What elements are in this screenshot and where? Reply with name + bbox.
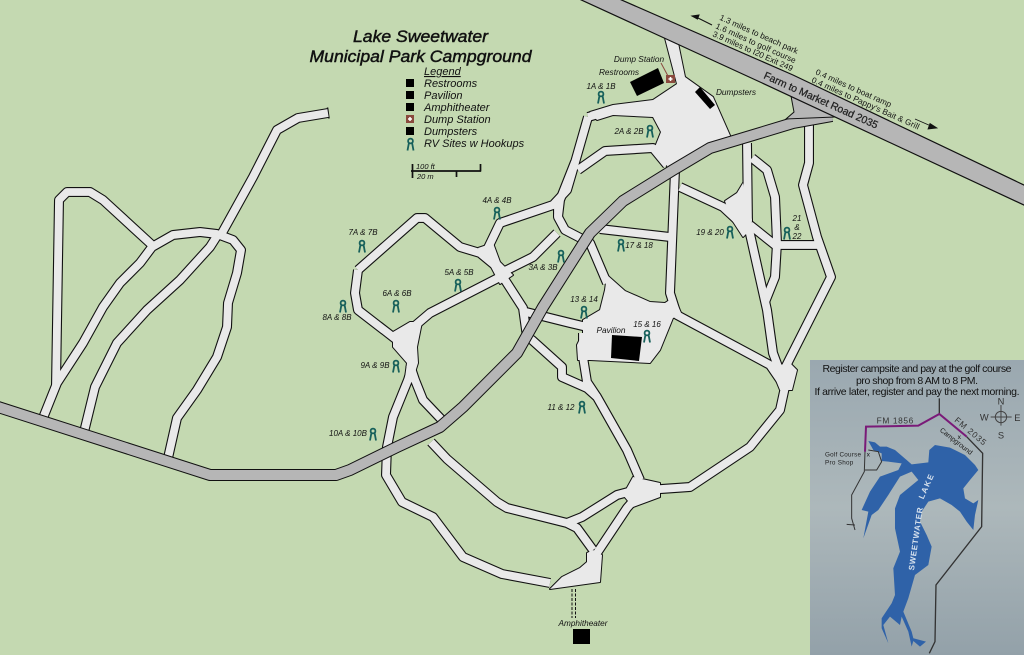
RV site 11 & 12 — [548, 402, 585, 414]
scale bar — [411, 162, 481, 181]
RV site 21 & 22: 21 — [792, 214, 801, 223]
RV site 11 & 12: 11 & 12 — [548, 403, 575, 412]
RV site 21 & 22: & — [794, 223, 800, 232]
RV site 21 & 22: 22 — [792, 232, 802, 241]
lake name: LAKE — [917, 472, 936, 500]
RV site 19 & 20 — [696, 227, 733, 238]
legend: Pavilion — [424, 90, 463, 102]
compass rose: W — [980, 412, 989, 422]
RV site 7A & 7B: 7A & 7B — [348, 228, 378, 237]
directions toward the east: 0.4 miles to boat ramp — [814, 68, 893, 109]
RV site 8A & 8B — [322, 301, 352, 322]
scale bar: 100 ft — [416, 162, 436, 171]
compass rose: N — [998, 396, 1004, 406]
registration instructions: If arrive later, register and pay the next morning. — [814, 386, 1020, 398]
panel: registration and lake location photo — [810, 360, 1024, 655]
RV site 13 & 14 — [570, 295, 598, 318]
RV site 3A & 3B: 3A & 3B — [528, 263, 558, 272]
legend: Dumpsters — [424, 126, 478, 138]
RV site 15 & 16 — [633, 320, 661, 342]
building: restrooms — [599, 67, 664, 96]
registration instructions: pro shop from 8 AM to 8 PM. — [856, 375, 978, 387]
legend heading: Legend — [424, 66, 462, 78]
campground road network — [43, 38, 831, 589]
RV site 21 & 22 — [784, 214, 802, 241]
RV site 2A & 2B: 2A & 2B — [613, 127, 644, 136]
RV site 1A & 1B — [586, 82, 616, 104]
directions toward the west — [711, 13, 800, 73]
RV site 4A & 4B — [482, 196, 512, 220]
title: Municipal Park Campground — [310, 48, 533, 66]
legend: Amphitheater — [423, 102, 491, 114]
building: amphitheater — [558, 589, 609, 644]
RV site 6A & 6B: 6A & 6B — [382, 289, 412, 298]
road labels: x — [958, 434, 962, 441]
icon: dump station — [614, 54, 675, 83]
RV site 6A & 6B — [382, 289, 412, 312]
west road and golf course loop — [847, 450, 882, 530]
directions toward the west: 1.6 miles to golf course — [714, 22, 798, 65]
road: junction with Farm to Market Road — [786, 96, 850, 119]
RV site 10A & 10B — [329, 429, 376, 440]
legend — [406, 66, 525, 150]
road labels: Golf Course — [825, 452, 861, 459]
building: amphitheater: Amphitheater — [558, 618, 609, 628]
road: Farm to Market Road 2035 — [577, 0, 1024, 206]
road label: Farm to Market Road 2035: Farm to Market Road 2035 — [762, 70, 880, 132]
RV site 4A & 4B: 4A & 4B — [482, 196, 512, 205]
RV site 10A & 10B: 10A & 10B — [329, 429, 368, 438]
RV site 9A & 9B: 9A & 9B — [360, 361, 390, 370]
RV site 13 & 14: 13 & 14 — [570, 295, 598, 304]
building: dumpsters: Dumpsters — [716, 87, 756, 97]
RV site 17 & 18 — [618, 240, 653, 252]
legend icon: dumpsters — [406, 127, 414, 135]
RV site 3A & 3B — [528, 251, 564, 272]
RV site 9A & 9B — [360, 361, 399, 372]
RV site 15 & 16: 15 & 16 — [633, 320, 661, 329]
RV site 1A & 1B: 1A & 1B — [586, 82, 616, 91]
legend icon: restrooms — [406, 79, 414, 87]
panel background — [810, 360, 1024, 655]
directions toward the east: 0.4 miles to Pappy's Bait & Grill — [810, 76, 921, 131]
legend: Dump Station — [424, 114, 491, 126]
compass rose — [980, 396, 1020, 440]
legend icon: RV sites — [408, 139, 414, 150]
scale bar: 20 m — [416, 172, 434, 181]
arrow: west — [692, 15, 712, 25]
road labels: x — [867, 452, 871, 459]
RV site 5A & 5B: 5A & 5B — [444, 268, 474, 277]
RV site 8A & 8B: 8A & 8B — [322, 313, 352, 322]
registration instructions: Register campsite and pay at the golf course — [822, 363, 1012, 375]
directions toward the west: 3.9 miles to I20 Exit 249 — [711, 30, 795, 73]
road labels — [825, 415, 989, 467]
RV site 7A & 7B — [348, 228, 378, 252]
highway lines — [929, 398, 983, 653]
title: Lake Sweetwater — [353, 28, 489, 46]
building: pavilion — [596, 325, 642, 361]
road labels: FM 1856 — [877, 416, 914, 426]
legend icon: pavilion — [406, 91, 414, 99]
RV site 17 & 18: 17 & 18 — [625, 241, 653, 250]
legend icon: dump station — [406, 115, 414, 123]
building: restrooms: Restrooms — [599, 67, 639, 77]
RV site 5A & 5B — [444, 268, 474, 292]
compass rose: E — [1014, 413, 1020, 423]
building: pavilion: Pavilion — [596, 325, 626, 335]
road labels: Campground — [938, 427, 973, 457]
RV site 19 & 20: 19 & 20 — [696, 228, 724, 237]
compass rose: S — [998, 430, 1004, 440]
road labels: FM 2035 — [953, 415, 989, 447]
road labels: Pro Shop — [825, 460, 854, 467]
icon: dump station: Dump Station — [614, 54, 665, 64]
registration instructions — [814, 363, 1020, 398]
legend icon: amphitheater — [406, 103, 414, 111]
arrow: east — [915, 119, 937, 129]
purple route — [865, 414, 967, 452]
road: winding county road — [0, 116, 832, 475]
legend: RV Sites w Hookups — [424, 138, 525, 150]
lake — [862, 441, 978, 647]
RV site 2A & 2B — [613, 126, 653, 138]
title — [310, 28, 533, 66]
lake name: SWEETWATER — [907, 507, 925, 571]
lake name — [907, 472, 936, 571]
location map — [825, 396, 1020, 653]
building: dumpsters — [695, 87, 756, 109]
directions toward the west: 1.3 miles to beach park — [718, 13, 800, 56]
legend: Restrooms — [424, 78, 478, 90]
